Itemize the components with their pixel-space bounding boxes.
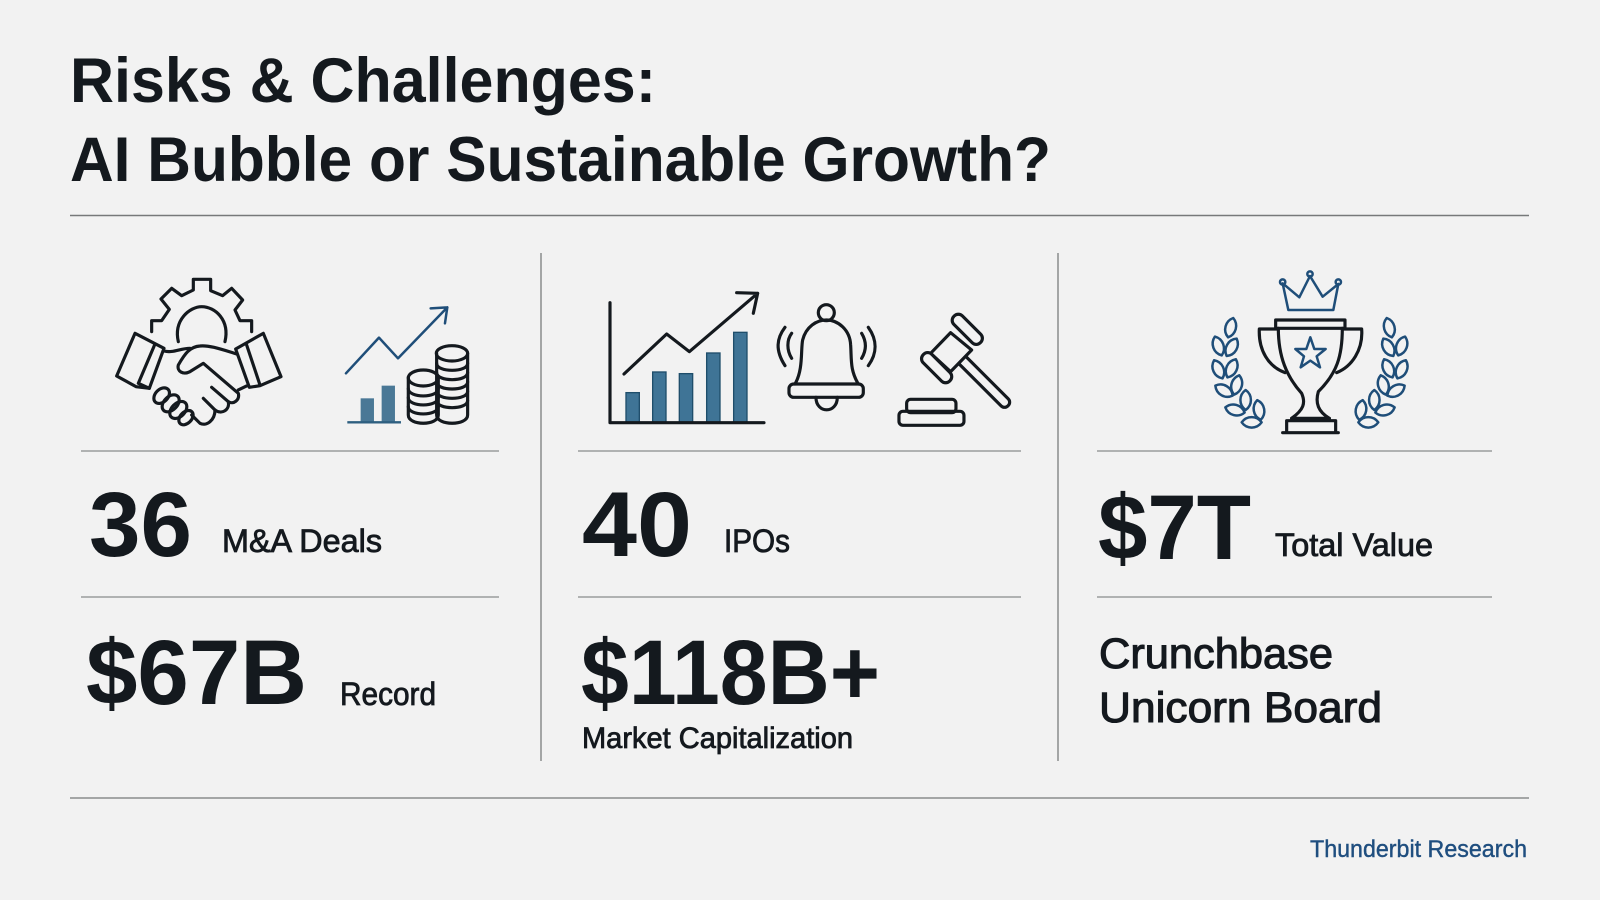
stat: 40 IPOs: IPOs (724, 523, 790, 559)
stat: $67B record: Record (340, 676, 436, 712)
stat: $118B+ market capitalization: $118B+ (581, 622, 880, 724)
icon: ringing bell (778, 305, 875, 410)
panel: M&A deals (86, 279, 468, 724)
icon: bar chart with rising arrow (610, 293, 764, 423)
stat: $7T total value: $7T (1098, 477, 1251, 579)
panel: unicorn board (1098, 271, 1433, 732)
text: Crunchbase Unicorn Board: Unicorn Board (1099, 684, 1382, 732)
title: Risks & Challenges: (70, 46, 656, 116)
stat: $7T total value: Total Value (1275, 527, 1433, 563)
icon: trophy with crown and laurels (1209, 271, 1411, 433)
title (70, 46, 1051, 195)
stat: $118B+ market capitalization: Market Capitalization (582, 722, 853, 755)
stat: $67B record: $67B (86, 622, 307, 724)
panel: IPOs (581, 293, 1012, 755)
text: Crunchbase Unicorn Board (1099, 630, 1382, 732)
icon: growth chart and coins (346, 307, 468, 423)
stat: $7T total value (1098, 477, 1433, 579)
stat: 36 M&A deals: M&A Deals (222, 523, 382, 559)
title: AI Bubble or Sustainable Growth? (70, 125, 1051, 195)
source credit: Thunderbit Research (1310, 836, 1527, 863)
stat: 40 IPOs (582, 474, 790, 576)
text: Crunchbase Unicorn Board: Crunchbase (1099, 630, 1333, 678)
stat: 40 IPOs: 40 (582, 474, 692, 576)
icon: gavel (899, 312, 1012, 425)
stat: 36 M&A deals: 36 (89, 474, 192, 576)
icon: handshake with gear (117, 279, 281, 428)
stat: $67B record (86, 622, 436, 724)
stat: 36 M&A deals (89, 474, 382, 576)
